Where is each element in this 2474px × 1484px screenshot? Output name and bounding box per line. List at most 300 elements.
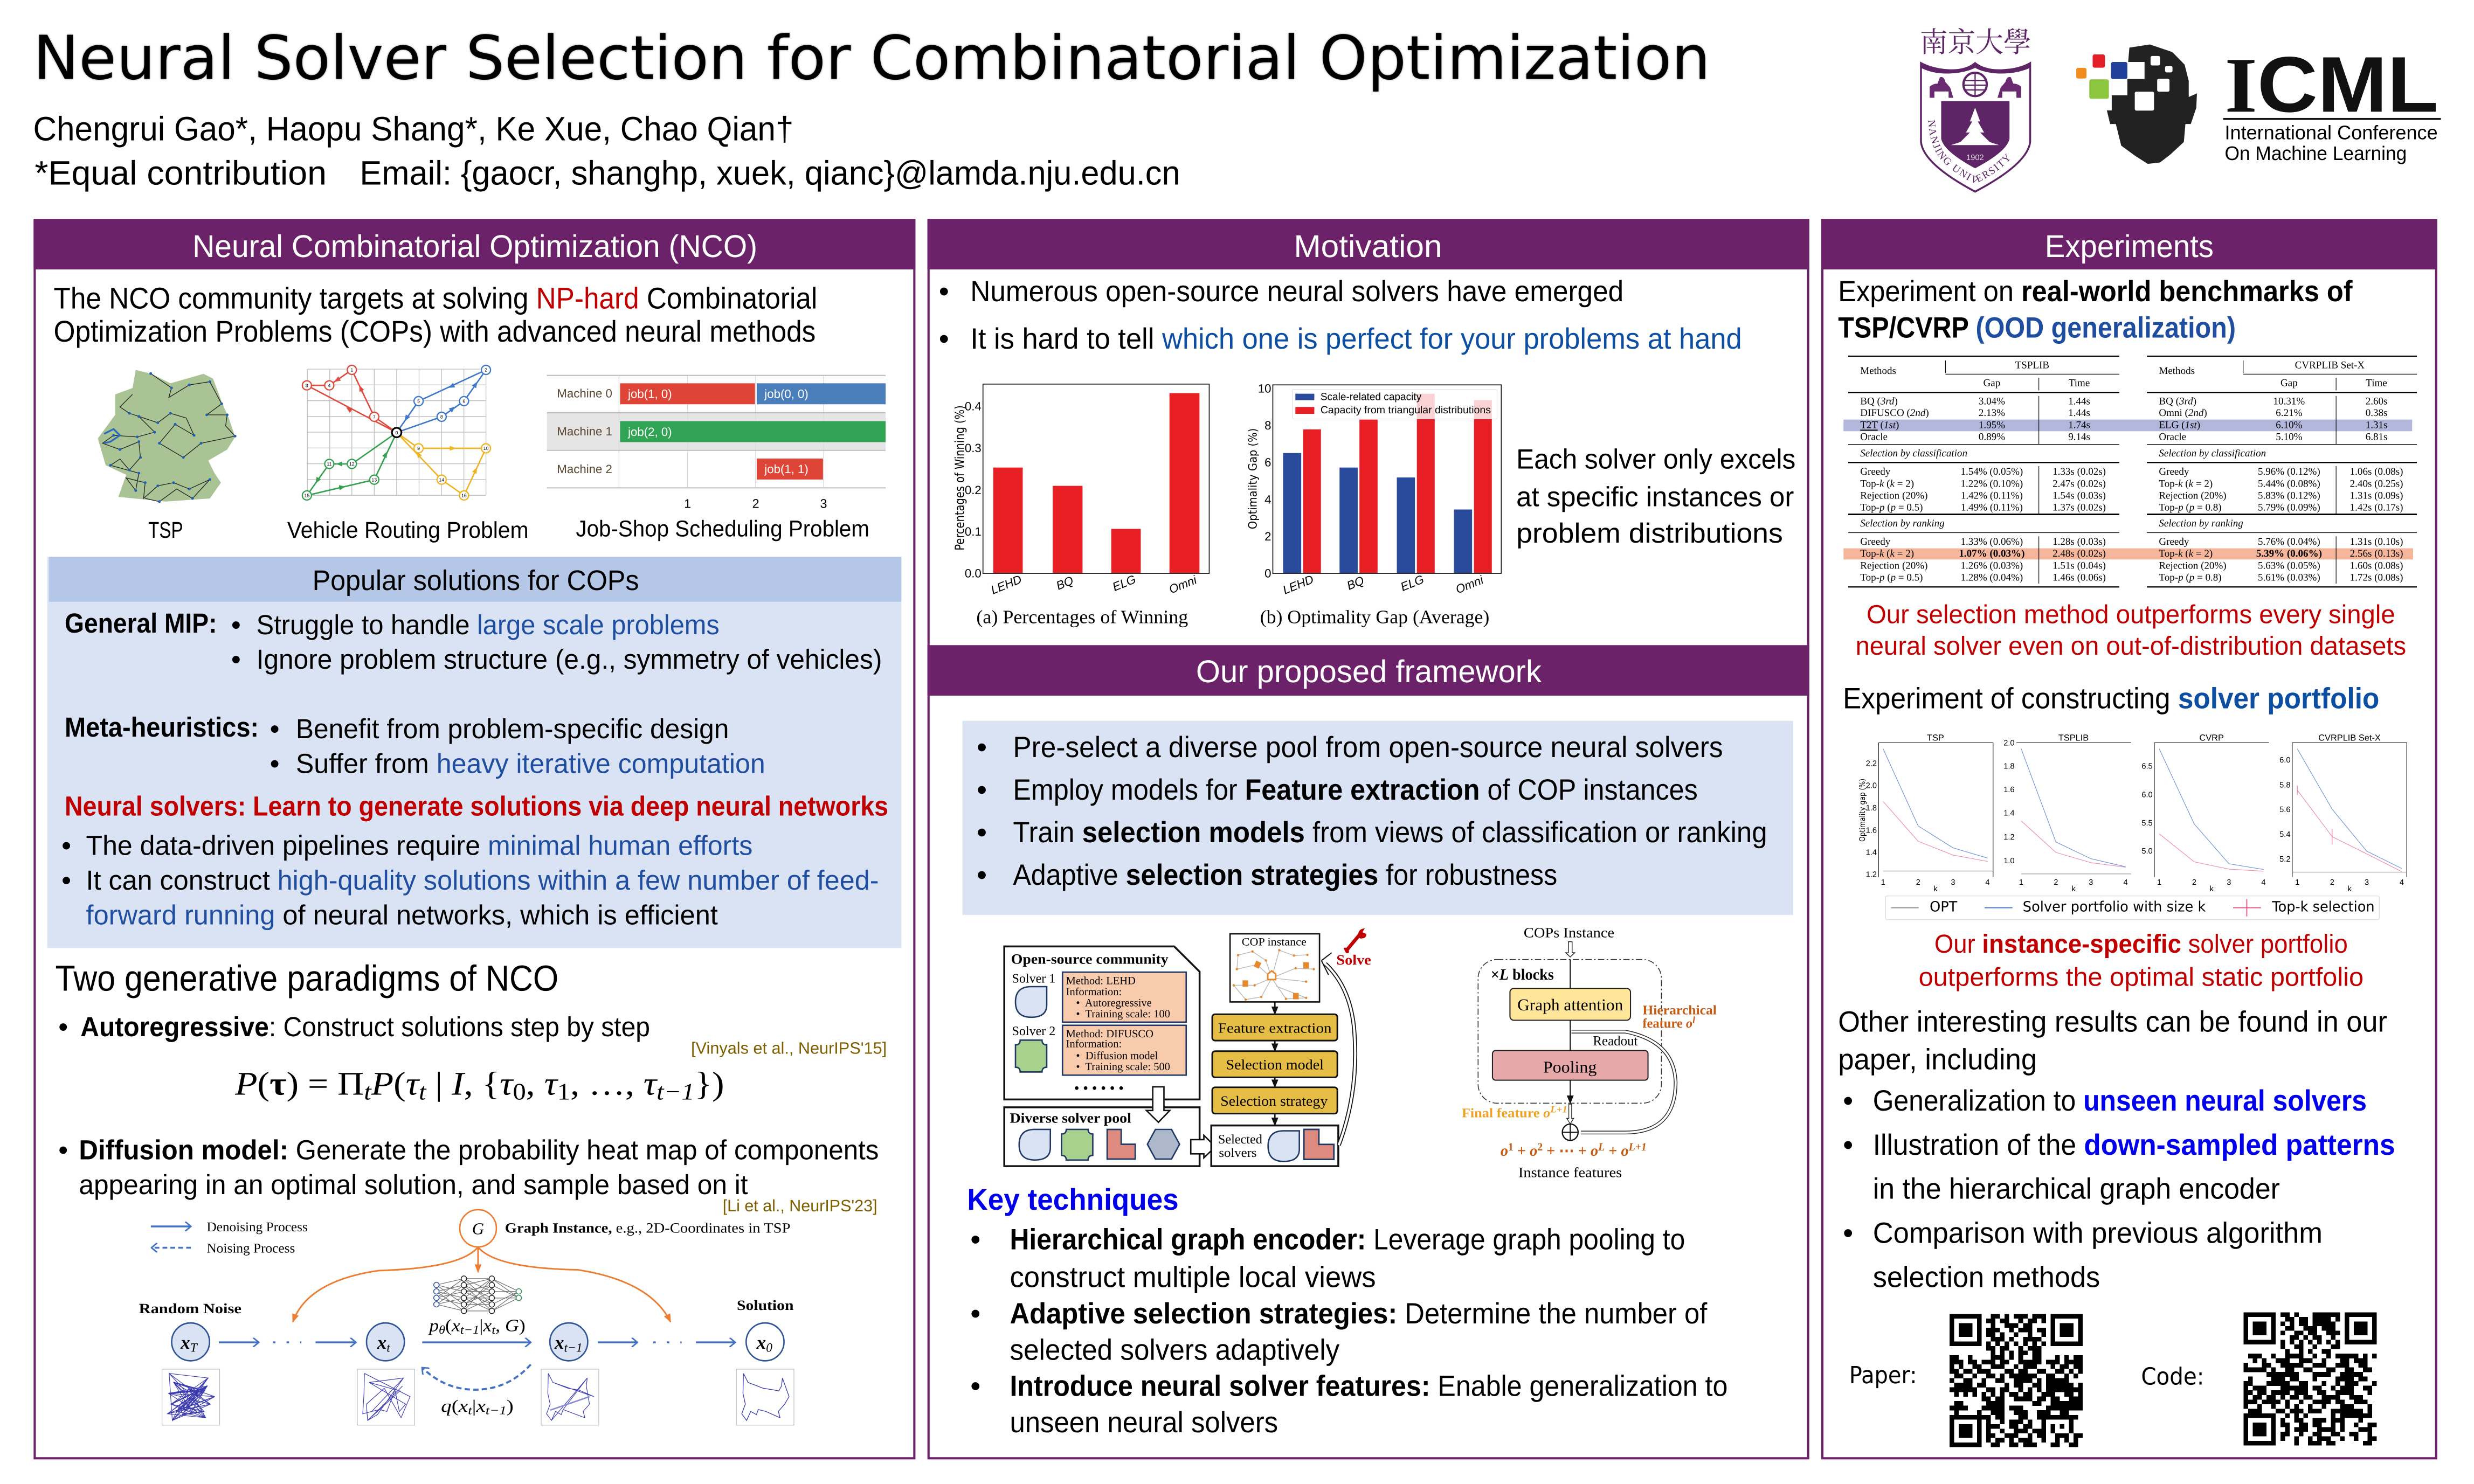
box: popular solutions for COPs bbox=[47, 557, 901, 948]
table: benchmark results: 2.60s bbox=[2366, 397, 2388, 407]
nodes: diffusion states: t−1 bbox=[564, 1341, 583, 1355]
label: paper: Paper: bbox=[1849, 1361, 1917, 1390]
plot: CVRP: 6.5 bbox=[2141, 762, 2153, 772]
legend: denoising and noising: Noising Process bbox=[206, 1240, 295, 1256]
table: benchmark results: 1.31s bbox=[2366, 420, 2388, 431]
table: benchmark results: 5.61% (0.03%) bbox=[2258, 573, 2320, 584]
chart: percentages of winning: 0.0 bbox=[965, 566, 982, 580]
table: benchmark results: 9.14s bbox=[2068, 432, 2091, 443]
legend: portfolio plots bbox=[1885, 896, 2379, 920]
nodes: diffusion states: x bbox=[181, 1332, 190, 1354]
text: meta-heuristics: Benefit from problem-specific design bbox=[296, 713, 729, 745]
diagram: hierarchical graph encoder bbox=[1462, 925, 1718, 1180]
legend: portfolio plots: Top-k selection bbox=[2270, 900, 2375, 916]
callout: selection outperforms bbox=[1855, 601, 2406, 661]
chart: optimality gap: 2 bbox=[1264, 529, 1271, 544]
diagram: hierarchical graph encoder: + ⋯ + bbox=[1543, 1143, 1591, 1161]
plot: TSP: 1.8 bbox=[1866, 804, 1877, 814]
thumbnails: TSP heatmaps bbox=[162, 1369, 794, 1425]
table: benchmark results: 1.60s (0.08s) bbox=[2350, 561, 2403, 572]
legend: denoising and noising bbox=[151, 1218, 308, 1256]
box: selected solvers: solvers bbox=[1219, 1146, 1257, 1160]
table: benchmark results: 3.04% bbox=[1979, 397, 2006, 407]
plot: TSP: 1.2 bbox=[1866, 871, 1877, 880]
box: COP instance bbox=[1230, 934, 1319, 1002]
plot: TSP: 4 bbox=[1985, 879, 1990, 888]
arrow: readout feedback bbox=[1572, 1031, 1676, 1133]
table: benchmark results: 0.89% bbox=[1979, 432, 2006, 443]
chart: job-shop schedule: job(1, 0) bbox=[626, 387, 673, 401]
heading: popular solutions: Popular solutions for COPs bbox=[313, 565, 639, 597]
text: autoregressive: , …, bbox=[570, 1065, 644, 1102]
table: benchmark results: 1.06s (0.08s) bbox=[2350, 467, 2403, 478]
text: autoregressive: I, { τ bbox=[452, 1065, 512, 1102]
diagram: hierarchical graph encoder: feature o bbox=[1642, 1017, 1692, 1031]
text: key techniques list bbox=[970, 1223, 1727, 1439]
table: benchmark results: Top-k (k = 2) bbox=[1860, 549, 1914, 560]
table: benchmark results: Top-p (p = 0.8) bbox=[2159, 503, 2222, 514]
diagram: hierarchical graph encoder: Final feature o bbox=[1462, 1106, 1550, 1120]
box: open-source community: •••••• bbox=[1074, 1081, 1124, 1095]
text: key techniques list: unseen neural solvers bbox=[1010, 1405, 1278, 1439]
text: autoregressive: Autoregressive: Construct solutions step by step bbox=[80, 1011, 650, 1043]
diagram: vehicle routing: 14 bbox=[439, 477, 445, 483]
callout: instance-specific portfolio bbox=[1919, 931, 2364, 992]
text: diffusion model: • bbox=[58, 1134, 68, 1166]
box: open-source community: Method: LEHD bbox=[1066, 975, 1136, 987]
diagram: vehicle routing: 8 bbox=[440, 414, 444, 420]
plot: TSPLIB: k bbox=[2071, 885, 2076, 894]
text: autoregressive: P bbox=[369, 1065, 394, 1102]
authors bbox=[33, 110, 1180, 192]
table: benchmark results: 5.44% (0.08%) bbox=[2258, 479, 2320, 490]
formula: noising: t−1 bbox=[486, 1403, 507, 1417]
text: key techniques list: construct multiple local views bbox=[1010, 1260, 1376, 1293]
diagram: vehicle routing: 10 bbox=[483, 445, 489, 452]
intro text bbox=[54, 283, 817, 349]
table: benchmark results: 5.83% (0.12%) bbox=[2258, 491, 2320, 502]
formula: denoising: , bbox=[495, 1317, 505, 1336]
diagram: hierarchical graph encoder: COPs Instance bbox=[1524, 925, 1614, 940]
panel header: Motivation: Motivation bbox=[1294, 230, 1442, 265]
table: benchmark results: 5.39% (0.06%) bbox=[2256, 549, 2322, 560]
QR code: code bbox=[2244, 1315, 2377, 1443]
table: benchmark results: Greedy bbox=[1860, 537, 1891, 548]
text: key techniques list: selected solvers adaptively bbox=[1010, 1333, 1340, 1366]
table: benchmark results: 1.37s (0.02s) bbox=[2053, 503, 2106, 514]
plot: TSP: 2.0 bbox=[1866, 782, 1877, 791]
plot: CVRPLIB Set-X: 1 bbox=[2295, 879, 2300, 888]
chart: optimality gap: LEHD bbox=[1281, 572, 1316, 597]
chart: optimality gap: 8 bbox=[1264, 419, 1271, 433]
table: benchmark results: 1.28s (0.03s) bbox=[2053, 537, 2106, 548]
nodes: diffusion states: x bbox=[555, 1332, 564, 1354]
table: benchmark results: 5.76% (0.04%) bbox=[2258, 537, 2320, 548]
table: benchmark results: 2.48s (0.02s) bbox=[2053, 549, 2106, 560]
callout: selection outperforms: Our selection method outperforms every single bbox=[1867, 601, 2395, 629]
table: benchmark results: 10.31% bbox=[2273, 397, 2306, 407]
plot: TSP: 2.2 bbox=[1866, 760, 1877, 769]
formula: denoising: t bbox=[492, 1323, 497, 1337]
diagram: vehicle routing: 4 bbox=[328, 383, 331, 389]
plot: CVRP: 1 bbox=[2157, 879, 2162, 888]
table: benchmark results: 1.44s bbox=[2068, 408, 2091, 419]
chart: optimality gap: ELG bbox=[1399, 572, 1426, 594]
table: benchmark results: 1.31s (0.09s) bbox=[2350, 491, 2403, 502]
table: benchmark results: BQ (3rd) bbox=[1860, 397, 1898, 407]
text: autoregressive: [Vinyals et al., NeurIPS'15] bbox=[691, 1039, 887, 1058]
diagram: vehicle routing: 0 bbox=[395, 429, 398, 436]
text: motivation bullets bbox=[939, 274, 1742, 355]
text: neural solvers: The data-driven pipelines require minimal human efforts bbox=[86, 830, 753, 861]
table: benchmark results: 1.31s (0.10s) bbox=[2350, 537, 2403, 548]
diagram: hierarchical graph encoder: + bbox=[1514, 1143, 1530, 1161]
chart: percentages of winning: Omni bbox=[1167, 573, 1199, 597]
text: key techniques list: Adaptive selection strategies: Determine the number of bbox=[1010, 1296, 1709, 1330]
logo: ICML: On Machine Learning bbox=[2224, 143, 2407, 165]
text: neural solvers: It can construct high-quality solutions within a few number of feed- bbox=[86, 864, 879, 896]
text: diffusion model: Diffusion model: Generate the probability heat map of components bbox=[79, 1134, 879, 1166]
table: benchmark results: 1.33s (0.02s) bbox=[2053, 467, 2106, 478]
chart: optimality gap: Optimality Gap (%) bbox=[1246, 428, 1260, 529]
node: graph instance: G bbox=[472, 1222, 485, 1239]
plot: CVRP: 4 bbox=[2261, 879, 2266, 888]
diagram: hierarchical graph encoder: L bbox=[1597, 1141, 1605, 1154]
logo: Nanjing University: NANJING UNIVERSITY bbox=[1928, 120, 2010, 183]
table: benchmark results: 0.38s bbox=[2366, 408, 2388, 419]
chart: optimality gap: (b) Optimality Gap (Average) bbox=[1260, 606, 1489, 628]
table: benchmark results: Greedy bbox=[1860, 467, 1891, 478]
table: benchmark results: 6.81s bbox=[2366, 432, 2388, 443]
table: benchmark results: Top-p (p = 0.5) bbox=[1860, 573, 1923, 584]
node: graph instance: Graph Instance, e.g., 2D-Coordinates in TSP bbox=[505, 1220, 791, 1236]
formula: denoising: | bbox=[479, 1317, 483, 1336]
authors: Email: {gaocr, shanghp, xuek, qianc}@lamda.nju.edu.cn bbox=[360, 155, 1180, 192]
diagram: vehicle routing: 5 bbox=[417, 398, 420, 405]
text: autoregressive: τ bbox=[544, 1065, 560, 1102]
box: open-source community: Information: bbox=[1066, 1038, 1122, 1051]
chart: percentages of winning: LEHD bbox=[989, 572, 1025, 597]
diagram: hierarchical graph encoder: o bbox=[1621, 1143, 1629, 1161]
legend: portfolio plots: Solver portfolio with size k bbox=[2023, 900, 2207, 916]
chart: percentages of winning: 0.3 bbox=[965, 441, 982, 455]
text: general MIP: • bbox=[231, 609, 241, 640]
table: benchmark results: Rejection (20%) bbox=[2159, 561, 2227, 572]
plot: CVRPLIB Set-X: k bbox=[2347, 885, 2352, 894]
chart: percentages of winning: BQ bbox=[1054, 573, 1076, 593]
arrow: selected solvers solve instance bbox=[1322, 953, 1355, 1145]
node: graph instance bbox=[460, 1210, 791, 1247]
icon: aggregate bbox=[1563, 1124, 1578, 1140]
text: diffusion model: [Li et al., NeurIPS'23] bbox=[723, 1197, 877, 1216]
box: framework steps: Pre-select a diverse pool from open-source neural solvers bbox=[1013, 730, 1723, 764]
captions: problem types: Job-Shop Scheduling Problem bbox=[576, 517, 869, 543]
formula: denoising: p bbox=[429, 1317, 438, 1336]
diagram: vehicle routing: 11 bbox=[327, 461, 332, 467]
chart: optimality gap: 4 bbox=[1264, 493, 1271, 507]
labels: random noise and solution: Random Noise bbox=[139, 1301, 241, 1316]
plot: CVRPLIB Set-X: 5.2 bbox=[2279, 855, 2291, 865]
text: other results: in the hierarchical graph encoder bbox=[1873, 1172, 2280, 1205]
formula: denoising: x bbox=[452, 1317, 459, 1336]
nodes: diffusion states: t bbox=[386, 1341, 391, 1355]
chart: job-shop schedule: Machine 1 bbox=[557, 424, 612, 439]
chart: optimality gap bbox=[1246, 382, 1501, 628]
labels: random noise and solution: Solution bbox=[737, 1298, 793, 1313]
table: benchmark results: 1.54% (0.05%) bbox=[1961, 467, 2023, 478]
chart: job-shop schedule bbox=[547, 376, 886, 511]
callout: instance-specific portfolio: outperforms the optimal static portfolio bbox=[1919, 964, 2364, 992]
plot: TSP: TSP bbox=[1927, 734, 1945, 744]
table: benchmark results: Selection by classification bbox=[1860, 448, 1967, 460]
text: autoregressive: }) bbox=[694, 1065, 724, 1102]
plot: CVRP: 3 bbox=[2227, 879, 2231, 888]
formula: denoising: t−1 bbox=[460, 1323, 479, 1337]
text: key techniques list: • bbox=[970, 1296, 980, 1330]
text: each solver only excels bbox=[1516, 443, 1796, 549]
table: benchmark results: Gap bbox=[1984, 378, 2000, 389]
plot: CVRPLIB Set-X: CVRPLIB Set-X bbox=[2318, 734, 2381, 744]
table: benchmark results: Methods bbox=[1860, 366, 1897, 377]
logo: ICML: ICML bbox=[2224, 41, 2438, 129]
icon: neural network bbox=[434, 1276, 521, 1314]
logo: Nanjing University: 1902 bbox=[1966, 154, 1984, 163]
table: benchmark results: Rejection (20%) bbox=[2159, 491, 2227, 502]
plot: CVRPLIB Set-X: 2 bbox=[2330, 879, 2335, 888]
text: each solver only excels: problem distributions bbox=[1516, 517, 1783, 549]
plot: TSPLIB: 1.4 bbox=[2003, 809, 2015, 819]
diagram: hierarchical graph encoder: 1 bbox=[1508, 1141, 1514, 1154]
table: benchmark results: 1.42% (0.11%) bbox=[1961, 491, 2023, 502]
callout: instance-specific portfolio: Our instance-specific solver portfolio bbox=[1934, 931, 2348, 959]
diagram: diffusion process bbox=[139, 1210, 794, 1425]
table: benchmark results: Selection by ranking bbox=[1860, 518, 1946, 530]
diagram: vehicle routing: 7 bbox=[373, 414, 376, 420]
chart: percentages of winning: Percentages of Winning (%) bbox=[953, 405, 967, 551]
table: benchmark results: 5.96% (0.12%) bbox=[2258, 467, 2320, 478]
panel header: Motivation bbox=[928, 219, 1809, 269]
section header: proposed framework bbox=[928, 645, 1809, 696]
table: benchmark results: 1.44s bbox=[2068, 397, 2091, 407]
plot: TSP: 2 bbox=[1916, 879, 1920, 888]
text: general MIP: • bbox=[231, 643, 241, 675]
table: benchmark results: 1.72s (0.08s) bbox=[2350, 573, 2403, 584]
panel: Motivation and framework bbox=[928, 219, 1809, 1458]
formula: denoising: ( bbox=[445, 1317, 452, 1336]
box: open-source community: Solver 1 bbox=[1012, 972, 1055, 986]
box: framework steps: • bbox=[977, 773, 987, 806]
title: Neural Solver Selection for Combinatorial Optimization bbox=[33, 24, 1710, 95]
plot: TSPLIB: 1.8 bbox=[2003, 762, 2015, 772]
text: general MIP: Struggle to handle large scale problems bbox=[257, 609, 720, 640]
chart: job-shop schedule: 1 bbox=[684, 497, 692, 511]
diagram: vehicle routing: 1 bbox=[350, 367, 354, 373]
text: other results: Generalization to unseen neural solvers bbox=[1873, 1084, 2367, 1117]
text: key techniques list: • bbox=[970, 1223, 980, 1256]
chart: percentages of winning: 0.1 bbox=[965, 525, 982, 539]
box: open-source community: • Training scale: 100 bbox=[1076, 1008, 1171, 1021]
formula: noising: x bbox=[476, 1398, 484, 1417]
table: benchmark results: 2.40s (0.25s) bbox=[2350, 479, 2403, 490]
table: benchmark results: 5.63% (0.05%) bbox=[2258, 561, 2320, 572]
nodes: diffusion states: x bbox=[377, 1332, 386, 1354]
text: neural solvers: forward running of neural networks, which is efficient bbox=[86, 899, 718, 931]
plot: TSPLIB: TSPLIB bbox=[2058, 734, 2089, 744]
diagram: hierarchical graph encoder: l bbox=[1692, 1015, 1696, 1026]
text: meta-heuristics: Suffer from heavy iterative computation bbox=[296, 748, 765, 779]
diagram: hierarchical graph encoder: L+1 bbox=[1549, 1106, 1567, 1115]
chart: optimality gap: 10 bbox=[1258, 382, 1271, 396]
text: other results: selection methods bbox=[1873, 1260, 2100, 1293]
panel header: NCO: Neural Combinatorial Optimization (NCO) bbox=[192, 230, 757, 265]
diagram: hierarchical graph encoder: o bbox=[1501, 1143, 1508, 1161]
plot: TSP: 1.4 bbox=[1866, 849, 1877, 858]
text: autoregressive: • bbox=[58, 1011, 68, 1043]
box: selected solvers: Selected bbox=[1218, 1133, 1262, 1147]
table: benchmark results: 1.22% (0.10%) bbox=[1961, 479, 2023, 490]
table: benchmark results bbox=[1843, 356, 2417, 587]
table: benchmark results: Gap bbox=[2280, 378, 2298, 389]
box: diverse solver pool: Diverse solver pool bbox=[1010, 1110, 1132, 1126]
legend: denoising and noising: Denoising Process bbox=[206, 1218, 308, 1235]
table: benchmark results: 1.28% (0.04%) bbox=[1961, 573, 2023, 584]
table: benchmark results: Top-k (k = 2) bbox=[1860, 479, 1914, 490]
table: benchmark results: Omni (2nd) bbox=[2159, 408, 2207, 419]
text: meta-heuristics: • bbox=[270, 748, 280, 779]
plot: CVRPLIB Set-X: 3 bbox=[2365, 879, 2369, 888]
table: benchmark results: Oracle bbox=[1860, 432, 1888, 443]
arrows: pipeline flow bbox=[1274, 1002, 1275, 1126]
text: other results: Illustration of the down-sampled patterns bbox=[1873, 1128, 2395, 1161]
table: benchmark results: Selection by ranking bbox=[2159, 518, 2244, 530]
box: COP instance: COP instance bbox=[1242, 936, 1307, 948]
chart: job-shop schedule: Machine 2 bbox=[557, 462, 612, 476]
box: pooling bbox=[1492, 1051, 1648, 1080]
panel: Neural Combinatorial Optimization bbox=[33, 219, 915, 1458]
logo: ICML: International Conference bbox=[2224, 122, 2438, 144]
boxes: feature, model and strategy steps: Feature extraction bbox=[1218, 1020, 1332, 1036]
box: graph attention bbox=[1510, 988, 1630, 1020]
captions: problem types: Vehicle Routing Problem bbox=[287, 519, 529, 544]
table: benchmark results: Top-p (p = 0.5) bbox=[1860, 503, 1923, 514]
table: benchmark results: Top-k (k = 2) bbox=[2159, 549, 2213, 560]
table: benchmark results: DIFUSCO (2nd) bbox=[1860, 408, 1929, 419]
arrow: pool to selected bbox=[1191, 1135, 1215, 1158]
nodes: diffusion states: T bbox=[190, 1341, 198, 1355]
table: benchmark results: 1.46s (0.06s) bbox=[2053, 573, 2106, 584]
captions: problem types: TSP bbox=[148, 519, 183, 544]
text: benchmark heading: TSP/CVRP (OOD generalization) bbox=[1838, 311, 2236, 344]
table: benchmark results: Rejection (20%) bbox=[1860, 491, 1928, 502]
table: benchmark results: Rejection (20%) bbox=[1860, 561, 1928, 572]
formula: noising: ) bbox=[507, 1398, 514, 1417]
text: autoregressive: t bbox=[364, 1080, 372, 1106]
table: benchmark results: T2T (1st) bbox=[1860, 420, 1899, 431]
chart: optimality gap: 6 bbox=[1264, 455, 1271, 469]
QR code: paper bbox=[1950, 1316, 2083, 1445]
label: code: Code: bbox=[2141, 1362, 2204, 1391]
text: key techniques list: • bbox=[970, 1369, 980, 1402]
formula: denoising: x bbox=[483, 1317, 491, 1336]
box: open-source community: • Training scale: 500 bbox=[1076, 1061, 1171, 1073]
plot: TSP: k bbox=[1933, 885, 1938, 894]
box: framework steps: • bbox=[977, 730, 987, 764]
legend: capacity bbox=[1292, 390, 1497, 419]
section header: proposed framework: Our proposed framework bbox=[1196, 655, 1543, 690]
diagram: hierarchical graph encoder: o bbox=[1530, 1143, 1537, 1161]
box: framework steps: Employ models for Feature extraction of COP instances bbox=[1013, 773, 1698, 806]
plot: CVRPLIB Set-X: 5.4 bbox=[2279, 831, 2291, 840]
table: benchmark results: 1.54s (0.03s) bbox=[2053, 491, 2106, 502]
text: benchmark heading: Experiment on real-world benchmarks of bbox=[1838, 274, 2354, 308]
panel header: Experiments bbox=[1821, 219, 2437, 269]
text: general MIP bbox=[65, 607, 882, 675]
diagram: vehicle routing: 15 bbox=[304, 493, 310, 499]
box: open-source community: • Diffusion model bbox=[1076, 1050, 1158, 1063]
formula: noising: q (x bbox=[441, 1398, 466, 1417]
arrow: community to pool bbox=[1146, 1087, 1170, 1122]
chart: portfolio line plots bbox=[1858, 734, 2407, 920]
box: pooling: Pooling bbox=[1543, 1060, 1598, 1077]
table: benchmark results: 5.10% bbox=[2276, 432, 2303, 443]
label: solve: Solve bbox=[1336, 952, 1371, 968]
formula: noising: | bbox=[472, 1398, 476, 1417]
logo: Nanjing University bbox=[1920, 27, 2031, 193]
box: graph attention: Graph attention bbox=[1517, 998, 1625, 1015]
diagram: selection pipeline bbox=[1004, 928, 1371, 1166]
nodes: diffusion states: x bbox=[757, 1332, 766, 1354]
plot: TSPLIB: 4 bbox=[2124, 879, 2128, 888]
text: key techniques list: Introduce neural solver features: Enable generalization to bbox=[1010, 1369, 1727, 1402]
text: autoregressive: 0 bbox=[513, 1080, 526, 1106]
box: framework steps: • bbox=[977, 815, 987, 849]
plot: TSP: Optimality gap (%) bbox=[1858, 779, 1868, 842]
text: other results: • bbox=[1843, 1084, 1853, 1117]
text: each solver only excels: Each solver only excels bbox=[1516, 443, 1796, 475]
table: benchmark results: Oracle bbox=[2159, 432, 2186, 443]
table: benchmark results: 1.51s (0.04s) bbox=[2053, 561, 2106, 572]
chart: job-shop schedule: job(2, 0) bbox=[626, 425, 673, 439]
chart: percentages of winning: (a) Percentages of Winning bbox=[976, 606, 1188, 628]
plot: TSPLIB: 2 bbox=[2054, 879, 2058, 888]
text: neural solvers: Neural solvers: Learn to generate solutions via deep neural networks bbox=[65, 790, 889, 822]
logo: Nanjing University: 南京大學 bbox=[1920, 27, 2031, 58]
table: benchmark results: TSPLIB bbox=[2015, 360, 2050, 371]
table: benchmark results: 1.95% bbox=[1979, 420, 2006, 431]
text: autoregressive: (τ bbox=[393, 1065, 418, 1102]
text: key techniques list: Hierarchical graph encoder: Leverage graph pooling to bbox=[1010, 1223, 1685, 1256]
diagram: vehicle routing: 3 bbox=[306, 383, 309, 389]
plot: TSPLIB: 1 bbox=[2019, 879, 2024, 888]
logo: ICML bbox=[2076, 41, 2441, 165]
plot: CVRPLIB Set-X: 6.0 bbox=[2279, 756, 2291, 766]
text: general MIP: Ignore problem structure (e.g., symmetry of vehicles) bbox=[257, 643, 882, 675]
plot: CVRP bbox=[2141, 734, 2269, 894]
text: neural solvers: • bbox=[61, 864, 71, 896]
diagram: vehicle routing: 9 bbox=[417, 445, 420, 452]
table: benchmark results: 1.42s (0.17s) bbox=[2350, 503, 2403, 514]
box: open-source community: Method: DIFUSCO bbox=[1066, 1028, 1153, 1041]
heading: key techniques: Key techniques bbox=[967, 1184, 1179, 1218]
text: autoregressive bbox=[58, 1011, 887, 1106]
box: framework steps: Train selection models from views of classification or ranking bbox=[1013, 815, 1767, 849]
plot: TSPLIB bbox=[2003, 734, 2131, 894]
diagram: vehicle routing bbox=[302, 365, 490, 500]
table: benchmark results: Greedy bbox=[2159, 537, 2190, 548]
diagram: vehicle routing: 13 bbox=[371, 477, 377, 483]
formula: denoising: θ bbox=[439, 1323, 446, 1337]
boxes: feature, model and strategy steps: Selection strategy bbox=[1220, 1093, 1329, 1109]
